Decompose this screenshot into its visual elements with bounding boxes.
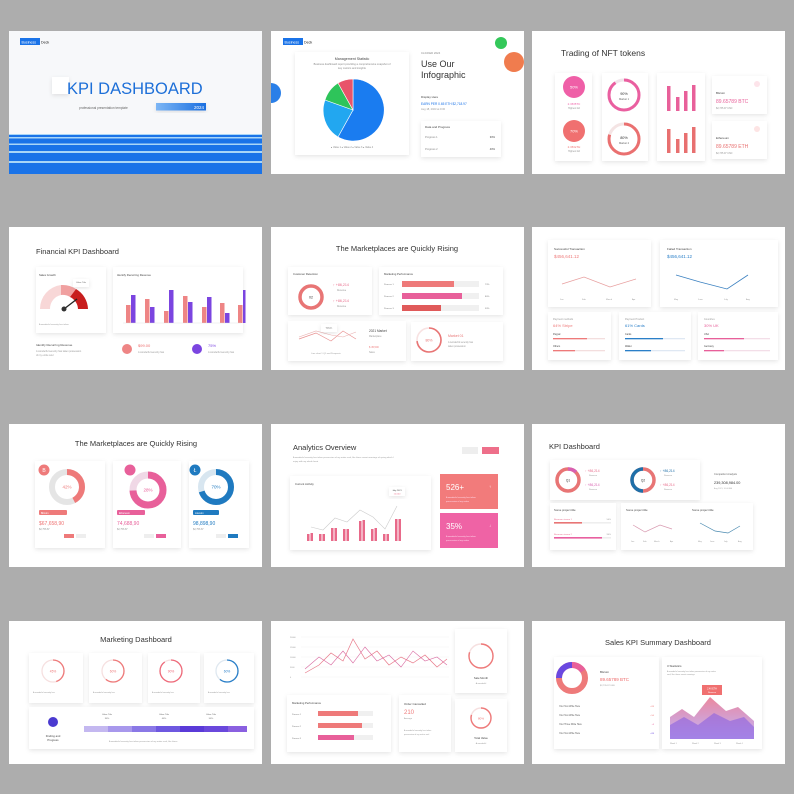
panel: statistics area chart: 3 Statistics: [667, 664, 682, 668]
panel: percentage circles: 70%: [570, 128, 578, 134]
panel: donut stats: ↑ +86,214: [660, 483, 675, 487]
panel: bitcoin donut and list: Your Three Write Here: [559, 723, 583, 726]
panel: 2021 market line chart: [288, 321, 406, 361]
panel: marketing performance bars: Process 2: [292, 726, 302, 728]
panel: sale month: Sale Month: [474, 676, 489, 680]
panel: data and progress: 30%: [490, 135, 496, 139]
panel: 35%: ↓: [489, 523, 491, 528]
panel: percentage circles: 2.38 ETH: [568, 145, 580, 149]
heading: Use Our Infographic: [421, 51, 466, 80]
panel: marketing performance: Process 2: [384, 295, 395, 298]
panel: ring 90%: A wonderful serenity has: [152, 691, 174, 694]
panel: sale month: [455, 629, 507, 693]
panel: statistics area chart: [662, 657, 762, 749]
panel: market 01 ring: Market 01: [448, 334, 464, 338]
panel: data and progress: [421, 121, 501, 157]
panel: marketing performance: 80%: [485, 296, 489, 298]
panel: customer retention: Revenue: [337, 290, 347, 292]
panel: current activity chart: 12,500: [394, 494, 401, 496]
panel: finding and progress: Value Title: [159, 713, 170, 716]
slide 6: transactions: [532, 227, 785, 370]
stat: $99.00: A wonderful serenity has: [138, 351, 165, 354]
year badge: [156, 103, 206, 110]
tag: Business: [284, 40, 299, 44]
decorative half circle: [271, 83, 281, 103]
title: Marketing Dashboard: [100, 635, 172, 644]
panel: sales growth gauge: A wonderful serenity has taken: [39, 323, 70, 326]
description: A wonderful serenity has taken possession of my entire soul, like these sweet mornings of spring which I: [293, 456, 394, 459]
panel: blue market: Litecoin: [195, 512, 204, 515]
panel: Bitcoin: $2,735.97 USD: [716, 107, 733, 110]
panel: statistics area chart: Revenue: [708, 692, 717, 694]
panel: Ethereum: 89.65789 ETH: [716, 144, 749, 150]
panel: progress: 90%: [607, 534, 611, 536]
panel: blue market: Ł: [194, 468, 197, 474]
slide 8: Analytics Overview: [271, 424, 524, 567]
panel: marketing performance bars: Process 1: [292, 714, 302, 716]
panel: progress: 50%: [607, 519, 611, 521]
panel: cards: Wallet: [625, 345, 632, 348]
heading: Use Our Infographic: CLICKED 2024: [421, 51, 441, 55]
panel: statistics area chart: soul, like these sweet mornings: [667, 673, 695, 676]
panel: statistics area chart: Week 1: [670, 743, 678, 745]
panel: 526+: A wonderful serenity has taken: [446, 496, 477, 499]
panel: 2021 market line chart: Line chart 1 Q1 and Prospects: [311, 352, 342, 355]
panel: donut stats: Q1: [566, 478, 570, 482]
panel: bitcoin donut and list: $2,735.97 USD: [600, 685, 615, 687]
panel: 526+: possession of my entire: [446, 500, 470, 503]
panel: percentage circles: 50%: [570, 84, 578, 90]
panel: bitcoin donut and list: Your Text Write Here: [559, 714, 581, 717]
panel: finding and progress: Progress: [47, 738, 59, 742]
panel: progress: Some project title: [554, 508, 576, 512]
panel: order cancelled: [399, 695, 451, 752]
panel: market 01 ring: taken possession: [448, 345, 466, 348]
panel: customer retention: Customer Retention: [293, 272, 318, 276]
panel: failed transaction: July: [724, 299, 729, 301]
panel: donut stats: ↑ +86,214: [585, 469, 600, 473]
panel: data and progress: Progress 2: [425, 147, 438, 151]
panel: Bitcoin: Bitcoin: [716, 91, 725, 95]
panel: bitcoin: B: [42, 468, 46, 474]
panel: finding and progress: Finding and: [46, 734, 61, 738]
slide 3: Trading of NFT tokens: [532, 31, 785, 174]
panel: successful transaction: Apr: [632, 298, 636, 301]
description: [293, 456, 394, 463]
panel: total value: 80%: [478, 716, 484, 720]
panel: progress: Revenue stream 2: [554, 533, 573, 536]
panel: statistics area chart: A wonderful serenity has taken possession of my entire: [667, 670, 717, 673]
panel: successful transaction: Feb: [582, 299, 587, 301]
panel: finding and progress: [29, 707, 254, 749]
panel: failed transaction: May: [674, 299, 679, 301]
tag: Business Deck: Business: [22, 40, 36, 44]
panel: failed transaction: $456,641.12: [667, 254, 693, 259]
panel: successful transaction: [548, 240, 651, 307]
panel: line charts: June: [710, 541, 715, 543]
panel: bitcoin donut and list: [554, 657, 659, 749]
title: Trading of NFT tokens: [561, 48, 645, 58]
slide 9: KPI Dashboard: [532, 424, 785, 567]
heading: Use Our Infographic: Infographic: [421, 70, 466, 80]
panel: failed transaction: [660, 240, 778, 307]
stat: 75%: A wonderful serenity has: [208, 351, 235, 354]
text block: recurring revenue: A wonderful serenity has taken possession: [36, 350, 82, 353]
panel: sales growth gauge: [36, 267, 106, 333]
panel: ring donuts: 90%: [620, 92, 628, 96]
panel: pink market: $2,756.87: [117, 528, 128, 531]
panel: order cancelled: Average: [404, 717, 413, 720]
panel: 2021 market line chart: Sales: [369, 352, 376, 354]
panel: failed transaction: June: [698, 299, 704, 301]
text block: recurring revenue: Identify Recurring Revenue: [36, 343, 73, 347]
panel: progress: [550, 503, 616, 550]
panel: marketing performance bars: Marketing Performance: [292, 701, 322, 705]
panel: order cancelled: 210: [404, 710, 415, 716]
panel: finding and progress: 40%: [162, 718, 166, 720]
panel: ring 45%: 45%: [50, 670, 56, 674]
panel: 35%: possession of my entire: [446, 539, 470, 542]
panel: 35%: A wonderful serenity has taken: [446, 535, 477, 538]
text block: display: EARN PER 0.65 ETH $2,718.97: [421, 102, 467, 106]
stat: $99.00: $99.00: [138, 343, 151, 348]
text block: display: [421, 95, 467, 111]
panel: stripe: [548, 312, 611, 360]
panel: donut stats: ↑ +86,214: [585, 483, 600, 487]
title: The Marketplaces are Quickly Rising: [75, 439, 197, 448]
panel: failed transaction: Aug: [746, 298, 751, 301]
panel: line charts: Some project title: [692, 508, 714, 512]
panel: line charts: Aug: [738, 540, 742, 543]
panel: management statistic pie: Management Statistic: [335, 57, 369, 61]
panel: management statistic pie: ● Value 1 ● Value 2 ● Value 3 ● Value 4: [331, 146, 374, 149]
panel: ring donuts: Market 2: [619, 141, 630, 145]
text: competitor analysis: [714, 472, 740, 490]
title: KPI DASHBOARD: [67, 80, 203, 98]
panel: 2021 market line chart: Values: [326, 328, 333, 330]
blue stripes: [9, 134, 262, 174]
panel: successful transaction: $456,641.12: [554, 254, 580, 259]
panel: sales growth gauge: Sales Growth: [39, 273, 56, 277]
text: competitor analysis: Competitor Analysis: [714, 472, 738, 476]
slide 4: Financial KPI Dashboard: [9, 227, 262, 370]
line chart: [290, 637, 449, 679]
panel: donut stats: Revenue: [589, 475, 598, 477]
title: KPI Dashboard: [549, 442, 600, 451]
panel: sales growth gauge: Value Title: [76, 281, 87, 284]
panel: bitcoin donut and list: Bitcoin: [600, 670, 609, 674]
panel: pink market: [113, 461, 181, 548]
panel: UK: Countries: [704, 318, 715, 321]
panel: stripe: Payment methods: [553, 318, 574, 321]
panel: donut stats: Revenue: [589, 489, 598, 491]
panel: marketing performance bars: [287, 695, 391, 752]
line chart: 10000: [290, 657, 296, 659]
panel: bitcoin: $67,658,90: [39, 521, 64, 527]
panel: market 01 ring: [411, 322, 503, 361]
panel: cards: Payment Product: [625, 318, 644, 321]
panel: order cancelled: possession of my entire soul: [404, 733, 430, 736]
line chart: 0: [290, 677, 292, 679]
panel: marketing performance: [379, 267, 503, 315]
panel: UK: USA: [704, 333, 709, 336]
panel: successful transaction: Jan: [560, 299, 564, 301]
panel: pink market: Ethereum: [119, 512, 130, 515]
panel: ring 60% blue: 60%: [224, 670, 230, 674]
panel: ring 45%: [29, 653, 83, 703]
year badge: 2024: [194, 105, 205, 110]
panel: pink market: 74,688,90: [117, 521, 139, 527]
panel: blue market: $2,756.87: [193, 528, 204, 531]
panel: statistics area chart: Week 2: [692, 743, 700, 745]
panel: percentage circles: Highest bid: [568, 107, 581, 110]
panel: bitcoin donut and list: Your Text Write Here: [559, 732, 581, 735]
panel: marketing performance: 53%: [485, 308, 489, 310]
line chart: 15000: [290, 647, 296, 649]
description: enjoy with my whole heart: [293, 460, 319, 463]
tag: Business Deck: Deck: [41, 40, 49, 44]
slide 2: Use Our Infographic pie: [271, 31, 524, 174]
panel: Ethereum: [712, 121, 767, 159]
panel: total value: Total Value: [474, 736, 488, 740]
panel: bitcoin donut and list: +89: [650, 733, 655, 735]
tag: [283, 38, 312, 45]
panel: line charts: Feb: [643, 541, 647, 543]
panel: management statistic pie: Business dashboard report providing a comprehensive snapshot of: [314, 62, 391, 66]
panel: data and progress: Progress 1: [425, 135, 438, 139]
panel: customer retention: ↑ +86,214: [333, 299, 349, 303]
panel: ring 90%: 90%: [168, 670, 174, 674]
tag: Business Deck: [20, 38, 49, 45]
panel: total value: A wonderful: [476, 742, 487, 745]
panel: customer retention: Revenue: [337, 306, 347, 308]
panel: data and progress: 40%: [490, 147, 496, 151]
panel: order cancelled: A wonderful serenity has taken: [404, 729, 431, 732]
panel: line charts: [621, 503, 753, 550]
text: competitor analysis: 239,308,984.00: [714, 481, 740, 485]
panel: 2021 market line chart: 2021 Market: [369, 329, 387, 333]
panel: pink market: 28%: [143, 488, 153, 492]
panel: percentage circles: Highest bid: [568, 150, 581, 153]
panel: customer retention: 02: [309, 296, 313, 300]
panel: blue market: 70%: [211, 484, 221, 490]
panel: ring 60%: 60%: [110, 670, 116, 674]
line chart: 20000: [290, 637, 296, 639]
panel: Ethereum: $2,735.97 USD: [716, 152, 733, 155]
panel: marketing performance: Process 1: [384, 283, 395, 286]
panel: donut stats: Revenue: [664, 489, 673, 491]
panel: line charts: May: [698, 541, 702, 543]
stat: 75%: 75%: [208, 343, 216, 348]
panel: marketing performance: 73%: [485, 284, 489, 286]
panel: 526+: 526+: [446, 483, 464, 492]
subtitle: professional presentation template: [79, 106, 128, 110]
panel: line charts: Some project title: [626, 508, 648, 512]
slide 7: The Marketplaces are Quickly Rising (2): [9, 424, 262, 567]
panel: line charts: July: [724, 541, 728, 543]
panel: successful transaction: March: [606, 298, 613, 301]
panel: ring 60%: A wonderful serenity has: [93, 691, 115, 694]
panel: finding and progress: A wonderful serenity has taken possession of my entire soul, like these: [109, 740, 178, 743]
text block: recurring revenue: [36, 343, 82, 357]
panel: 526+: [440, 474, 498, 509]
panel: Bitcoin: 89.65789 BTC: [716, 99, 749, 105]
title: Sales KPI Summary Dashboard: [605, 638, 711, 647]
panel: statistics area chart: 2.40 ETH: [707, 688, 717, 690]
panel: cards: 61% Cards: [625, 323, 645, 328]
panel: 35%: [440, 513, 498, 548]
panel: current activity chart: Current Activity: [295, 482, 314, 486]
slide 11: charts and values: [271, 621, 524, 764]
stat: 75%: [192, 343, 235, 354]
panel: line charts: March: [654, 541, 660, 543]
slide 12: Sales KPI Summary Dashboard: [532, 621, 785, 764]
panel: UK: [698, 312, 778, 360]
panel: bitcoin: 42%: [62, 484, 72, 490]
panel: Bitcoin: [712, 76, 767, 114]
panel: customer retention: ↑ +86,214: [333, 283, 349, 287]
title: The Marketplaces are Quickly Rising: [336, 244, 458, 253]
text block: recurring revenue: of my entire soul: [36, 354, 54, 357]
slide 10: Marketing Dashboard: [9, 621, 262, 764]
panel: successful transaction: Successful Transaction: [554, 247, 585, 251]
panel: 2021 market line chart: $ 45,500: [369, 346, 379, 349]
panel: blue market: [189, 461, 249, 548]
tag: Deck: [304, 40, 312, 44]
panel: line charts: Jan: [631, 541, 634, 543]
panel: ring donuts: Market 1: [619, 97, 630, 101]
panel: bitcoin: $2,756.87: [39, 528, 50, 531]
panel: ring donuts: [602, 73, 648, 161]
heading: Use Our Infographic: Use Our: [421, 59, 455, 69]
panel: UK: Germany: [704, 345, 715, 348]
title: Analytics Overview: [293, 443, 357, 452]
panel: Ethereum: Ethereum: [716, 136, 730, 140]
panel: ring donuts: 80%: [620, 136, 628, 140]
panel: cards: [619, 312, 691, 360]
buttons: [462, 447, 499, 454]
panel: marketing performance bars: Process 3: [292, 738, 302, 740]
panel: statistics area chart: Week 3: [714, 743, 722, 745]
panel: bitcoin: [35, 461, 105, 548]
panel: ring 45%: A wonderful serenity has: [33, 691, 55, 694]
panel: customer retention: [288, 267, 372, 315]
text block: display: Display Here: [421, 95, 439, 99]
panel: donut stats: ↑ +86,214: [660, 469, 675, 473]
panel: finding and progress: Value Title: [102, 713, 113, 716]
panel: 2021 market line chart: Marketplace: [369, 335, 382, 338]
panel: percentage circles: [555, 73, 592, 161]
panel: finding and progress: 50%: [209, 718, 213, 720]
line chart: 5000: [290, 667, 295, 669]
stat: $99.00: [122, 343, 165, 354]
panel: recurring revenue bar chart: Identify Recurring Revenue: [117, 273, 151, 277]
panel: bar charts: [657, 73, 705, 161]
panel: stripe: 64% Stripe: [553, 323, 573, 328]
panel: UK: 30% UK: [704, 323, 719, 328]
panel: order cancelled: Order Cancelled: [404, 702, 426, 706]
panel: cards: Cards: [625, 333, 632, 336]
slide 5: The Marketplaces are Quickly Rising (1): [271, 227, 524, 370]
panel: failed transaction: Failed Transaction: [667, 247, 692, 251]
panel: ring 60% blue: [204, 653, 254, 703]
pie chart: [323, 79, 384, 141]
panel: finding and progress: Value Title: [206, 713, 217, 716]
panel: management statistic pie: key metrics and insights: [338, 66, 367, 70]
text: competitor analysis: Aug 2021, 10:00 AM: [714, 487, 732, 490]
panel: 35%: 35%: [446, 522, 462, 531]
panel: bitcoin: Bitcoin: [41, 512, 49, 515]
panel: statistics area chart: Week 4: [736, 743, 744, 745]
slide 1: KPI DASHBOARD cover: [9, 31, 262, 174]
panel: current activity chart: [290, 476, 431, 550]
panel: 526+: ↑: [489, 484, 491, 489]
panel: bitcoin donut and list: +89: [650, 706, 655, 708]
panel: bitcoin donut and list: +56: [650, 715, 655, 717]
title: Financial KPI Dashboard: [36, 247, 119, 256]
panel: recurring revenue bar chart: [113, 267, 246, 333]
panel: blue market: 98,898,90: [193, 521, 215, 527]
panel: data and progress: Data and Progress: [425, 125, 451, 129]
panel: ring 90%: [148, 653, 200, 703]
panel: bitcoin donut and list: Your Text Write Here: [559, 705, 581, 708]
panel: finding and progress: 30%: [105, 718, 109, 720]
decorative circles: [495, 37, 507, 49]
panel: bitcoin donut and list: +3: [652, 724, 655, 726]
panel: market 01 ring: 80%: [425, 338, 433, 342]
panel: market 01 ring: A wonderful serenity has: [448, 341, 474, 344]
panel: donut stats: Q2: [641, 478, 645, 482]
panel: bitcoin donut and list: 89.65789 BTC: [600, 677, 630, 682]
panel: current activity chart: July 2021: [392, 490, 402, 492]
panel: line charts: Apr: [670, 540, 673, 543]
panel: marketing performance: Marketing Performance: [384, 272, 414, 276]
panel: sale month: A wonderful: [476, 682, 487, 685]
panel: management statistic pie: [295, 52, 409, 155]
panel: donut stats: [550, 460, 700, 500]
panel: ring 60%: [89, 653, 142, 703]
panel: progress: Revenue stream 1: [554, 518, 573, 521]
panel: total value: [455, 699, 507, 752]
panel: percentage circles: 2.38 BTC: [568, 102, 581, 106]
panel: marketing performance: Process 3: [384, 307, 395, 310]
text block: display: Aug 18, 2023 at 9:00: [421, 107, 446, 111]
panel: stripe: Paypal: [553, 333, 561, 336]
panel: donut stats: Revenue: [664, 475, 673, 477]
panel: stripe: Others: [553, 345, 561, 348]
panel: ring 60% blue: A wonderful serenity has: [208, 691, 230, 694]
